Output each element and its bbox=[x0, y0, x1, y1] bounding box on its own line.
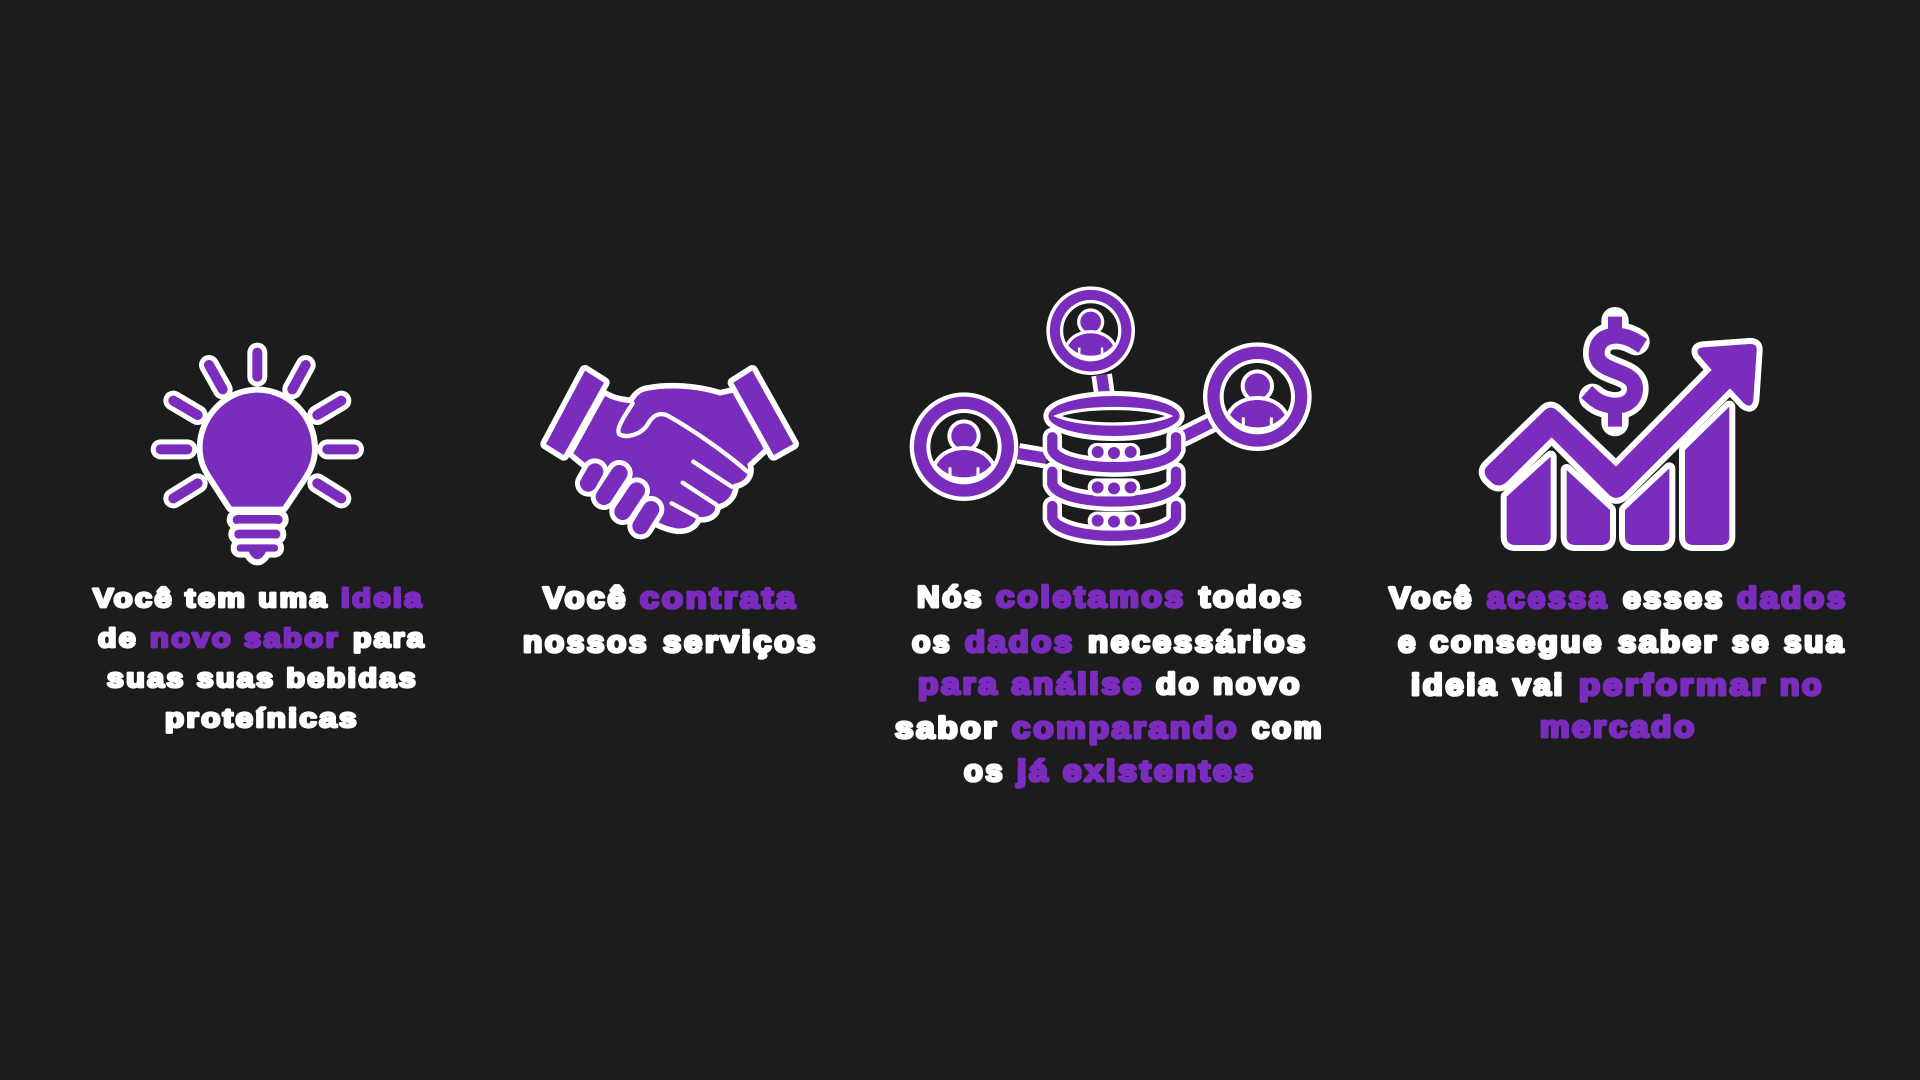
text block: step 2: nossos bbox=[523, 626, 649, 659]
text block: step 4 bbox=[1389, 582, 1848, 744]
text block: step 3: já existentes bbox=[1016, 755, 1256, 788]
text block: step 4: consegue bbox=[1430, 626, 1604, 659]
text block: step 1: proteínicas bbox=[165, 703, 359, 733]
text block: step 1: ideia bbox=[341, 583, 424, 613]
text block: step 4: performar bbox=[1579, 669, 1768, 702]
icon: database with users bbox=[910, 286, 1312, 536]
text block: step 3: comparando bbox=[1012, 712, 1239, 745]
text block: step 3: todos bbox=[1199, 581, 1304, 614]
text block: step 1: Você tem uma bbox=[93, 583, 329, 613]
icon: rising chart with dollar bbox=[1485, 317, 1757, 545]
text block: step 1: de bbox=[98, 623, 138, 653]
text block: step 4: dados bbox=[1737, 582, 1848, 615]
text block: step 4: esses bbox=[1623, 582, 1725, 615]
text block: step 4: se bbox=[1732, 626, 1771, 659]
text block: step 3: Nós bbox=[917, 581, 984, 614]
text block: step 1 bbox=[93, 583, 426, 733]
user circle: right bbox=[1203, 342, 1312, 451]
text block: step 4: ideia bbox=[1411, 669, 1499, 702]
text block: step 4: saber bbox=[1618, 626, 1719, 659]
text block: step 4: mercado bbox=[1540, 711, 1697, 744]
text block: step 2: serviços bbox=[663, 626, 818, 659]
text block: step 3: para análise bbox=[918, 668, 1144, 701]
text block: step 1: suas suas bebidas bbox=[107, 663, 418, 693]
text block: step 1: para bbox=[353, 623, 426, 653]
user circle: top bbox=[1046, 286, 1135, 375]
text block: step 3: necessários bbox=[1088, 626, 1308, 659]
icon: handshake bbox=[546, 371, 793, 528]
text block: step 3: coletamos bbox=[996, 581, 1186, 614]
text block: step 3: sabor bbox=[895, 712, 999, 745]
database cylinder bbox=[1048, 396, 1180, 536]
text block: step 4: vai bbox=[1513, 669, 1565, 702]
text block: step 3: do novo bbox=[1156, 668, 1302, 701]
text block: step 2: Você bbox=[543, 582, 628, 615]
text block: step 3: com bbox=[1252, 712, 1324, 745]
text block: step 4: Você bbox=[1389, 582, 1474, 615]
text block: step 4: e bbox=[1398, 626, 1418, 659]
user circle: left bbox=[910, 392, 1018, 501]
text block: step 3: os bbox=[912, 626, 952, 659]
text block: step 2: contrata bbox=[640, 582, 798, 615]
text block: step 3 bbox=[895, 581, 1324, 788]
text block: step 4: no bbox=[1780, 669, 1824, 702]
text block: step 2 bbox=[523, 582, 818, 659]
icon: light bulb bbox=[161, 353, 354, 559]
text block: step 4: sua bbox=[1784, 626, 1846, 659]
text block: step 1: novo sabor bbox=[150, 623, 340, 653]
text block: step 4: acessa bbox=[1487, 582, 1609, 615]
text block: step 3: os bbox=[964, 755, 1005, 788]
text block: step 3: dados bbox=[965, 626, 1075, 659]
